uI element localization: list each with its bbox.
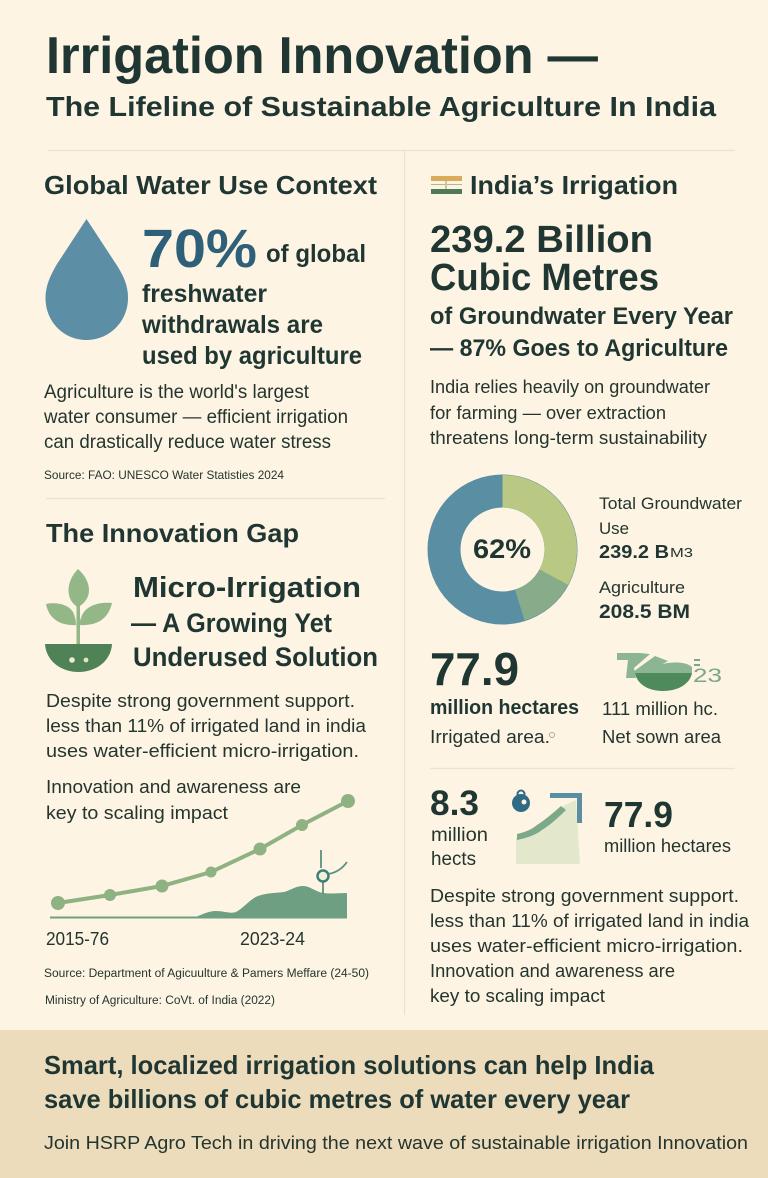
legend: groundwater figures: Total Groundwater [599, 494, 742, 513]
body text: agriculture water use: water consumer — efficient irrigation [43, 407, 348, 428]
source notes: micro-irrigation: Source: Department of Agicuulture & Pamers Meffare (24-50) [44, 968, 369, 980]
subheading: micro-irrigation: Micro-Irrigation [133, 572, 361, 604]
body text: micro-irrigation adoption: uses water-efficient micro-irrigation. [46, 740, 359, 761]
panel: the innovation gap [44, 518, 378, 1007]
body text: agriculture water use: Agriculture is the world's largest [44, 382, 310, 403]
stat: 8.3 million hects: hects [431, 849, 476, 870]
legend: groundwater figures: 239.2 B [599, 542, 669, 562]
footer banner: Join HSRP Agro Tech in driving the next wave of sustainable irrigation Innovation [44, 1132, 748, 1153]
body text: agriculture water use [43, 382, 348, 453]
body text: government support: Innovation and awareness are [430, 960, 675, 981]
source notes: micro-irrigation [44, 968, 369, 1007]
footer banner: Smart, localized irrigation solutions can help India [44, 1050, 655, 1080]
icon: indian flag [431, 176, 462, 194]
donut chart: groundwater share [444, 475, 577, 620]
panel: global water use context [43, 170, 377, 482]
stat: irrigated area: million hectares [430, 697, 579, 719]
body text: micro-irrigation adoption: key to scaling impact [46, 802, 228, 823]
stat: 70 percent of global freshwater: withdrawals are [141, 311, 323, 339]
stat: 70 percent of global freshwater: of global [266, 240, 366, 268]
title [46, 27, 717, 122]
stat: 70 percent of global freshwater [141, 219, 366, 370]
stat: net sown area [602, 699, 722, 747]
body text: government support: less than 11% of irrigated land in india [430, 910, 750, 931]
line chart: micro-irrigation growth: 2015-76 [46, 929, 109, 949]
stat: groundwater volume [430, 219, 733, 362]
body text: groundwater reliance: India relies heavily on groundwater [430, 376, 710, 397]
stat: 77.9 million hectares: million hectares [604, 836, 731, 856]
stat: irrigated area [430, 643, 579, 747]
title: The Lifeline of Sustainable Agriculture In India [46, 91, 717, 122]
heading: the innovation gap: The Innovation Gap [46, 518, 299, 548]
body text: agriculture water use: can drastically reduce water stress [44, 432, 331, 453]
stat: groundwater volume: of Groundwater Every Year [430, 303, 733, 330]
donut chart: groundwater share: 62% [473, 534, 531, 564]
source notes: micro-irrigation: Ministry of Agriculture: CoVt. of India (2022) [45, 995, 275, 1007]
subheading: micro-irrigation: Underused Solution [133, 642, 378, 672]
stat: net sown area: 111 million hc. [602, 699, 718, 719]
line chart: micro-irrigation growth [46, 794, 355, 949]
stat: 70 percent of global freshwater: 70% [142, 219, 257, 279]
legend: groundwater figures: 208.5 BM [599, 602, 690, 623]
stat: 77.9 million hectares [604, 794, 731, 856]
footer banner: save billions of cubic metres of water every year [44, 1084, 630, 1114]
subheading: micro-irrigation: — A Growing Yet [131, 608, 332, 638]
title: Irrigation Innovation — [46, 27, 598, 85]
legend: groundwater figures: Use [599, 519, 629, 538]
stat: 8.3 million hects [430, 784, 488, 870]
body text: groundwater reliance [430, 376, 710, 448]
stat: groundwater volume: Cubic Metres [430, 257, 659, 299]
stat: irrigated area: Irrigated area. [430, 727, 550, 747]
stat: 8.3 million hects: 8.3 [430, 784, 479, 823]
icon: net sown area bowl: 23 [693, 666, 722, 687]
body text: groundwater reliance: threatens long-term sustainability [430, 427, 708, 448]
legend: groundwater figures: Agriculture [599, 578, 685, 597]
stat: groundwater volume: — 87% Goes to Agriculture [430, 335, 728, 362]
stat: 77.9 million hectares: 77.9 [604, 794, 673, 835]
stat: 70 percent of global freshwater: freshwater [142, 280, 267, 308]
source note: global water: Source: FAO: UNESCO Water Statisties 2024 [44, 468, 284, 482]
panel: india's irrigation [430, 170, 750, 1006]
stat: groundwater volume: 239.2 Billion [430, 219, 653, 261]
subheading: micro-irrigation [131, 572, 378, 672]
body text: micro-irrigation adoption: less than 11% of irrigated land in india [46, 715, 367, 736]
stat: irrigated area: 77.9 [430, 643, 519, 695]
icon: water drop [46, 219, 128, 340]
legend: groundwater figures: M3 [670, 545, 693, 560]
icon: micro-irrigation slope [512, 790, 582, 864]
body text: government support: Despite strong government support. [430, 885, 739, 906]
heading: india's irrigation: India’s Irrigation [470, 170, 678, 200]
stat: net sown area: Net sown area [602, 727, 722, 747]
body text: government support [430, 885, 750, 1006]
body text: government support: key to scaling impact [430, 985, 605, 1006]
stat: 70 percent of global freshwater: used by agriculture [142, 342, 362, 370]
body text: micro-irrigation adoption: Innovation and awareness are [46, 776, 301, 797]
body text: micro-irrigation adoption: Despite strong government support. [46, 690, 355, 711]
body text: groundwater reliance: for farming — over extraction [430, 402, 666, 423]
stat: 8.3 million hects: million [431, 825, 488, 846]
line chart: micro-irrigation growth: 2023-24 [240, 929, 305, 949]
body text: micro-irrigation adoption [46, 690, 367, 823]
heading: global water use context: Global Water Use Context [44, 170, 377, 200]
legend: groundwater figures [599, 494, 742, 623]
icon: net sown area bowl [617, 653, 722, 691]
icon: seedling in bowl [45, 569, 112, 672]
footer banner [0, 1030, 768, 1178]
body text: government support: uses water-efficient micro-irrigation. [430, 935, 743, 956]
